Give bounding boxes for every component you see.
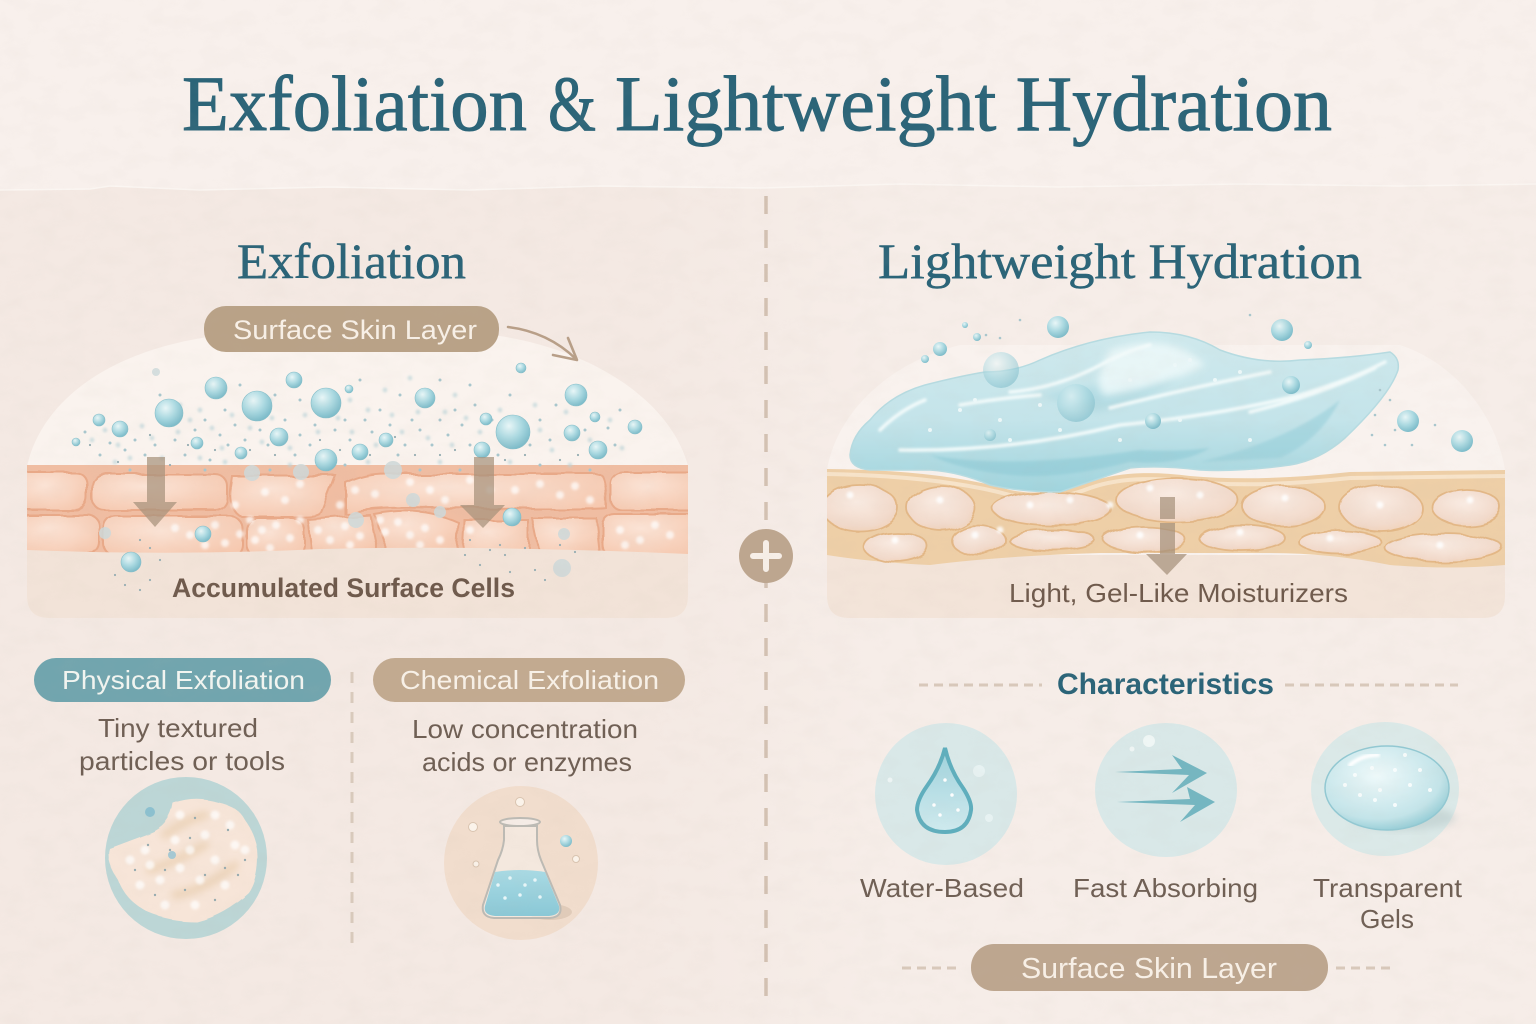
- heading: Characteristics: Characteristics: [1057, 668, 1274, 701]
- label: Accumulated Surface Cells: Accumulated Surface Cells: [172, 573, 515, 603]
- fine particles: [85, 380, 620, 470]
- label: Water-Based: Water-Based: [860, 873, 1024, 903]
- text: physical description: particles or tools: [79, 746, 285, 776]
- pill: Chemical Exfoliation: Chemical Exfoliation: [400, 665, 659, 695]
- text: physical description: Tiny textured: [98, 713, 258, 743]
- label: Transparent Gels: [1313, 873, 1463, 934]
- label: Transparent Gels: Gels: [1360, 904, 1414, 934]
- pill: Surface Skin Layer: [204, 306, 499, 352]
- title: Lightweight Hydration: [615, 60, 1332, 147]
- plus badge: [739, 529, 793, 583]
- panel: hydration skin diagram: [822, 315, 1505, 618]
- arrow: right down: [460, 457, 505, 528]
- icon: transparent gel: [1311, 722, 1459, 856]
- title: [182, 60, 1332, 147]
- blue droplets: [72, 363, 642, 572]
- arrow: absorption: [1146, 497, 1187, 575]
- text: physical description: [79, 713, 285, 776]
- label: Fast Absorbing: Fast Absorbing: [1073, 873, 1258, 903]
- lower layer base: [827, 555, 1505, 618]
- icon: fast-absorbing arrows: [1095, 723, 1237, 857]
- gel blob: [850, 332, 1398, 492]
- mist of fine particles: [92, 378, 622, 465]
- icon: flask: [444, 786, 598, 940]
- pill: bottom Surface Skin Layer: [902, 944, 1392, 991]
- pill: Physical Exfoliation: Physical Exfoliation: [62, 665, 305, 695]
- skin top highlight: [827, 474, 1505, 498]
- title: &: [548, 60, 596, 147]
- text: chemical description: Low concentration: [412, 714, 638, 744]
- center dashed divider: [764, 196, 768, 1000]
- skin band: [827, 469, 1505, 568]
- pill: Physical Exfoliation: [34, 658, 331, 702]
- label: Light, Gel-Like Moisturizers: Light, Gel-Like Moisturizers: [1009, 578, 1348, 608]
- arrow: left down: [133, 457, 177, 527]
- icon: scrub in dish: [105, 777, 267, 939]
- arrow: curved to dome: [508, 327, 577, 360]
- dome backdrop: [827, 345, 1505, 618]
- gel droplets: [921, 316, 1473, 452]
- accumulated layer base: [27, 552, 688, 618]
- icon: water drop: [875, 723, 1017, 865]
- pill: Chemical Exfoliation: [373, 658, 685, 702]
- pill: Surface Skin Layer: Surface Skin Layer: [233, 315, 477, 345]
- skin cells: [822, 478, 1503, 562]
- sub-column divider: [350, 672, 354, 945]
- white exfoliating flecks: [175, 480, 670, 548]
- label: Transparent Gels: Transparent: [1313, 873, 1463, 903]
- title: Exfoliation: [182, 60, 527, 147]
- heading: Exfoliation: Exfoliation: [237, 233, 466, 289]
- text: chemical description: [412, 714, 638, 777]
- text: chemical description: acids or enzymes: [422, 747, 632, 777]
- heading: Lightweight Hydration: Lightweight Hydration: [878, 233, 1362, 289]
- dome backdrop: [27, 336, 688, 618]
- panel: exfoliation skin diagram: [16, 336, 700, 618]
- pill: bottom Surface Skin Layer: Surface Skin Layer: [1021, 953, 1277, 985]
- skin cell band: [27, 465, 688, 554]
